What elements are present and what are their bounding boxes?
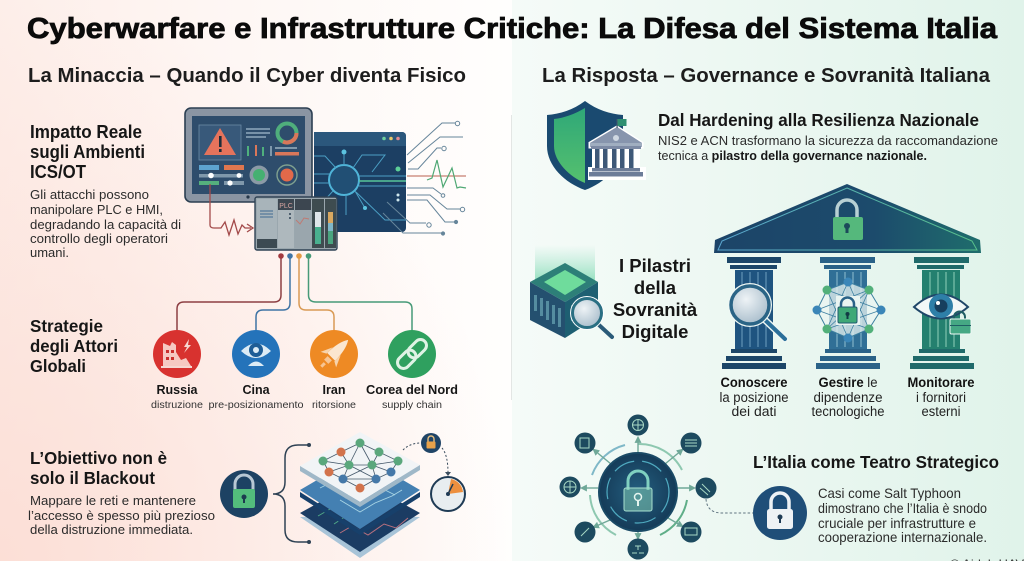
icon: clock (431, 477, 465, 511)
text block: hardening: tecnica a pilastro della governance nazionale. (658, 149, 927, 163)
text block: impatto reale: controllo degli operatori (30, 231, 168, 246)
heading: strategie: Globali (30, 356, 86, 376)
icon: shield with institution (547, 101, 646, 190)
bracket (273, 445, 309, 542)
text block: obiettivo: L’Obiettivo non è (30, 448, 167, 468)
text block: Salt Typhoon: cooperazione internazionale. (818, 529, 987, 545)
text block: hardening (658, 110, 998, 163)
icon: Russia destruction (153, 330, 201, 378)
icon: Cina surveillance eye (232, 330, 280, 378)
labels: pillars: esterni (922, 404, 960, 419)
hub: central lock with satellites (560, 414, 716, 560)
illustration: output circuit traces (383, 121, 466, 235)
pillar: conoscere (722, 257, 786, 369)
text block: Salt Typhoon: cruciale per infrastrutture e (818, 515, 976, 531)
labels: pillars: Monitorare (908, 375, 975, 390)
text block: impatto reale: Gli attacchi possono (30, 187, 149, 202)
text block: hardening: Dal Hardening alla Resilienza Nazionale (658, 110, 979, 130)
labels: pillars: dei dati (732, 404, 776, 419)
text block: obiettivo: Mappare le reti e mantenere (30, 493, 196, 508)
text block: impatto reale: sugli Ambienti (30, 142, 145, 162)
heading: Italia teatro: L’Italia come Teatro Strategico (753, 452, 999, 472)
heading: pilastri: I Pilastri (619, 255, 691, 276)
heading: pilastri: Digitale (622, 321, 688, 342)
illustration: PLC controller: PLC (279, 203, 293, 210)
text block: obiettivo: l’accesso è spesso più prezioso (28, 508, 215, 523)
text block: impatto reale: manipolare PLC e HMI, (30, 202, 163, 217)
illustration: HMI monitor (185, 108, 312, 202)
heading: pilastri: Sovranità (613, 299, 698, 320)
heading: pilastri (613, 255, 698, 342)
icon: lock badge (753, 486, 807, 540)
title: Cyberwarfare e Infrastrutture Critiche: La Difesa del Sistema Italia (27, 13, 998, 45)
icon: Corea del Nord chain link (388, 330, 436, 378)
text block: Salt Typhoon: dimostrano che l’Italia è snodo (818, 500, 987, 516)
temple roof with lock (714, 184, 981, 253)
icon: data cube with magnifier (530, 245, 612, 338)
labels: global actors: Cina (242, 383, 271, 397)
text block: obiettivo: della distruzione immediata. (30, 522, 193, 537)
icon: green lock badge (220, 470, 268, 518)
text block: impatto reale: ICS/OT (30, 162, 86, 182)
labels: global actors: distruzione (151, 399, 203, 411)
text block: impatto reale: Impatto Reale (30, 122, 142, 142)
arrow: HMI to PLC signal (210, 184, 253, 235)
connectors to global actors (177, 253, 412, 332)
labels: global actors: ritorsione (312, 399, 356, 411)
heading: strategie: Strategie (30, 316, 103, 336)
labels: pillars: Conoscere (720, 375, 788, 390)
text block: impatto reale: degradando la capacità di (30, 217, 181, 232)
heading: strategie: degli Attori (30, 336, 118, 356)
icon: Iran rocket (310, 330, 358, 378)
dashed connector (706, 499, 755, 513)
labels: pillars: Gestire le (818, 375, 878, 390)
background right (512, 0, 1024, 561)
labels: pillars: dipendenze (814, 390, 882, 405)
text block: hardening: NIS2 e ACN trasformano la sicurezza da raccomandazione (658, 134, 998, 148)
labels: global actors: Iran (323, 383, 345, 397)
labels: pillars: tecnologiche (812, 404, 884, 419)
text block: impatto reale (30, 122, 181, 260)
heading: strategie (30, 316, 118, 376)
labels: global actors: Russia (156, 383, 199, 397)
labels: pillars (720, 375, 975, 419)
heading: la minaccia: La Minaccia – Quando il Cyber diventa Fisico (28, 65, 466, 87)
text block: Salt Typhoon (818, 485, 987, 545)
labels: global actors: Corea del Nord (366, 383, 458, 397)
background left (0, 0, 512, 561)
illustration: circuit panel (314, 132, 406, 232)
text block: obiettivo: solo il Blackout (30, 468, 155, 488)
labels: global actors: pre-posizionamento (208, 399, 304, 411)
icon: small lock with dashed links (403, 433, 451, 476)
labels: pillars: i fornitori (916, 390, 966, 405)
heading: pilastri: della (634, 277, 677, 298)
pillar: monitorare (910, 257, 974, 369)
labels: global actors (151, 383, 458, 411)
text block: obiettivo (28, 448, 215, 537)
illustration: network layers (300, 432, 420, 558)
pillar: gestire (812, 257, 886, 369)
labels: global actors: supply chain (382, 399, 442, 411)
text block: Salt Typhoon: Casi come Salt Typhoon (818, 485, 961, 501)
labels: pillars: la posizione (720, 390, 788, 405)
illustration: PLC controller (255, 197, 337, 250)
text block: impatto reale: umani. (30, 245, 69, 260)
heading: la risposta: La Risposta – Governance e Sovranità Italiana (542, 65, 991, 87)
